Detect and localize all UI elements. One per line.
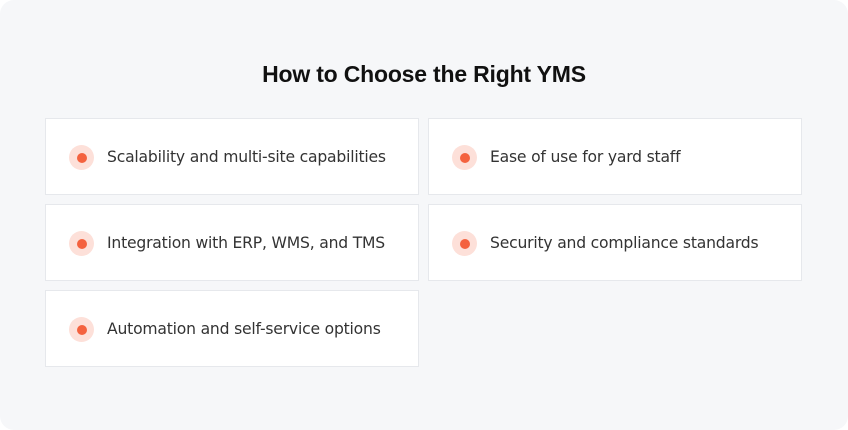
card: ease of use [428,118,802,195]
card: security [428,204,802,281]
card: integration: Integration with ERP, WMS, and TMS [107,234,385,252]
card: automation [45,290,419,367]
card: integration [45,204,419,281]
card: ease of use: Ease of use for yard staff [490,148,680,166]
card: scalability [45,118,419,195]
title: How to Choose the Right YMS [262,61,586,87]
card: security: Security and compliance standards [490,234,758,252]
card: automation: Automation and self-service options [107,320,381,338]
card: scalability: Scalability and multi-site capabilities [107,148,386,166]
